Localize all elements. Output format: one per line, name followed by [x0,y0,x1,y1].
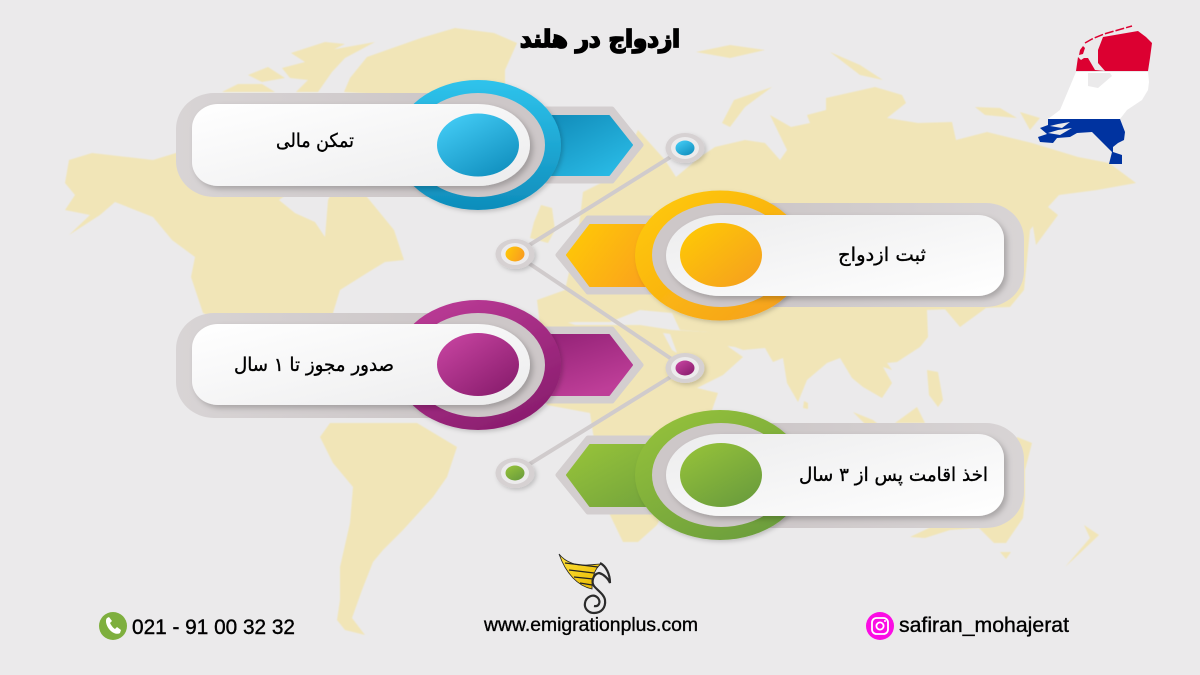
dot: yellow [496,239,534,269]
map: south america [320,423,457,635]
dot: green [496,458,534,488]
icon: logo winged s [559,554,610,613]
disc: blue [437,114,519,176]
dot: purple [666,353,704,383]
panel: permit up to one year [176,300,641,430]
arrow tab: purple [520,329,641,401]
phone contact [99,612,295,640]
title: ازدواج در هلند [520,25,680,53]
map: arctic islands [222,42,375,92]
map: greenland [344,28,517,97]
arrow tab: green [558,438,680,512]
disc: green [680,443,762,507]
icon: netherlands flag map [1038,26,1152,164]
map: africa and arabia [536,313,743,542]
icon: instagram [866,612,894,640]
panel: marriage registration [558,190,1024,320]
label: financial ability: تمکن مالی [276,130,354,152]
map: islands [696,45,1099,567]
phone number: 021 - 91 00 32 32 [132,616,295,639]
panel: residency after three years [558,410,1024,540]
label: residency after three years: اخذ اقامت پس از ۳ سال [799,464,988,486]
map: north america [65,100,404,370]
label: permit up to one year: صدور مجوز تا ۱ سال [234,354,394,376]
panel: financial ability [176,80,641,210]
label: marriage registration: ثبت ازدواج [838,244,926,266]
map: uk [530,205,555,243]
arrow tab: blue [520,109,641,181]
instagram handle: safiran_mohajerat [899,614,1069,637]
dot: blue [666,133,704,163]
connector lines [515,148,685,473]
instagram contact [866,612,1069,640]
map: eurasia [537,87,1136,402]
website address: www.emigrationplus.com [483,615,698,636]
disc: yellow [680,223,762,287]
disc: purple [437,333,519,396]
map: australia [910,437,1032,543]
map: kamchatka [1032,207,1058,245]
map: red sea cut [663,333,677,353]
icon: phone [99,612,127,640]
map: hudson bay cut [279,185,333,237]
arrow tab: yellow [558,218,680,292]
